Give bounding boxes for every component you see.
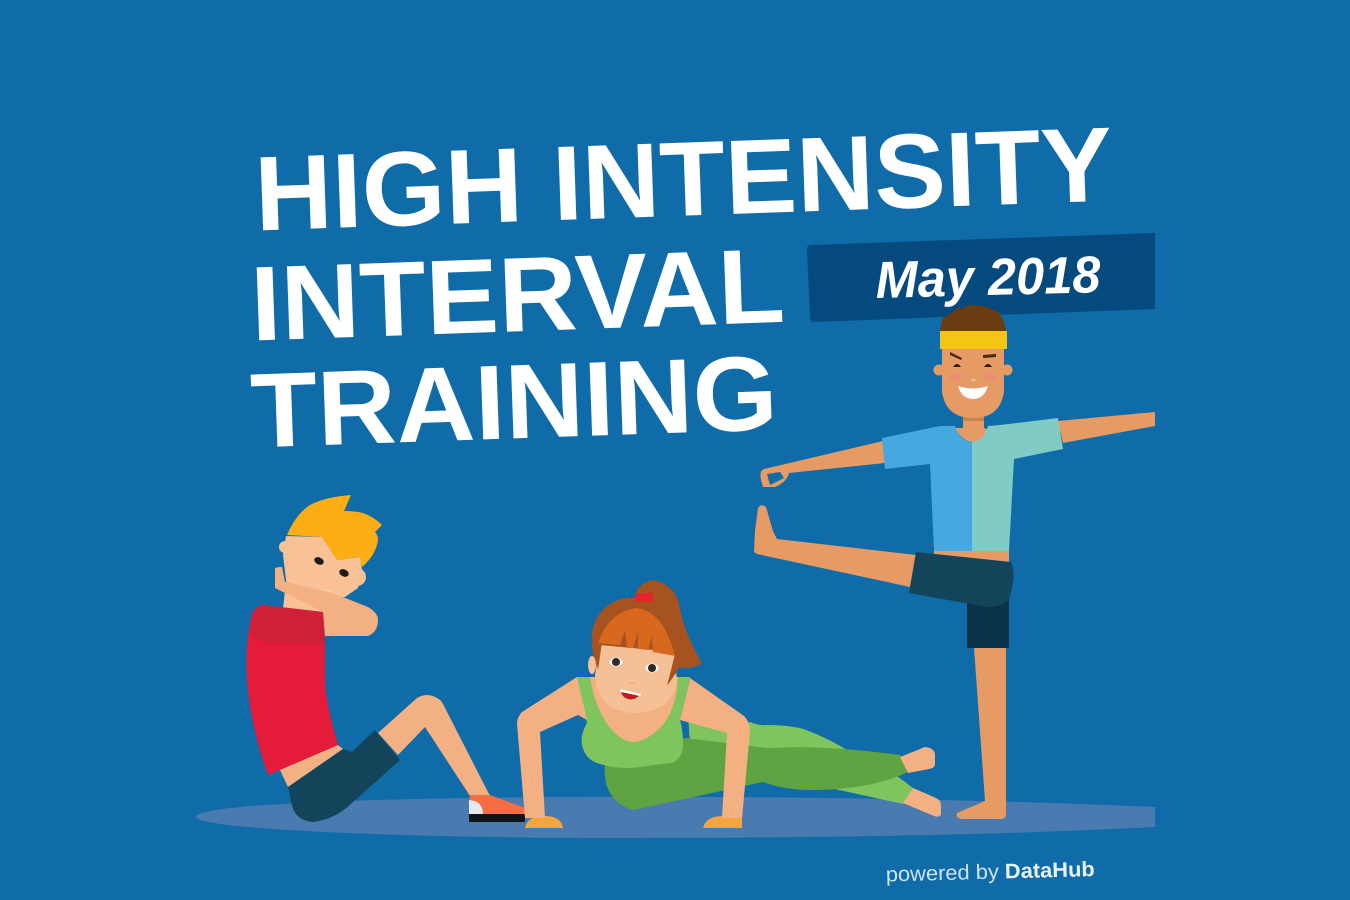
man face details — [949, 352, 997, 399]
man hair — [940, 305, 1006, 331]
woman side hair — [592, 640, 682, 686]
man shirt right — [972, 418, 1063, 551]
woman hands — [525, 816, 742, 828]
boy head — [279, 536, 366, 597]
man hand gap — [767, 472, 784, 485]
title — [249, 106, 1114, 470]
figure: woman doing push-ups — [517, 580, 941, 828]
title: TRAINING — [249, 334, 779, 470]
title: HIGH INTENSITY — [253, 106, 1114, 253]
woman body — [605, 738, 908, 810]
figure: man balancing on one leg — [754, 305, 1155, 819]
floor mat — [196, 797, 1155, 838]
man raised leg — [754, 505, 916, 587]
woman lower leg — [830, 776, 913, 804]
man head — [942, 345, 1004, 418]
date banner — [807, 233, 1155, 322]
man neck — [955, 410, 990, 442]
man headband — [940, 331, 1007, 349]
woman ponytail — [635, 580, 702, 668]
boy neck — [283, 590, 340, 615]
boy leg — [378, 695, 490, 796]
man waist — [934, 549, 1009, 564]
woman chest — [590, 677, 678, 742]
boy shorts — [288, 730, 400, 822]
woman feet — [900, 747, 941, 817]
boy belly — [280, 745, 343, 787]
man shirt left — [882, 426, 973, 551]
woman top — [577, 677, 690, 768]
woman face details — [610, 658, 658, 700]
man neck shadow — [963, 416, 984, 421]
man front shorts — [909, 552, 1014, 607]
woman fringe — [598, 608, 675, 656]
man right arm — [1058, 412, 1155, 443]
man ears — [934, 364, 1012, 376]
title: INTERVAL — [249, 227, 786, 363]
boy hair — [287, 495, 382, 567]
boy shirt — [246, 605, 338, 775]
woman face — [595, 645, 677, 713]
man left arm — [760, 441, 885, 487]
figure: boy doing sit-ups — [246, 495, 525, 822]
man standing leg — [956, 648, 1006, 819]
date banner: May 2018 — [875, 246, 1101, 310]
boy shoe — [469, 795, 525, 822]
credit: powered by DataHub — [886, 858, 1095, 886]
woman ear — [588, 656, 596, 674]
boy arm — [275, 567, 378, 636]
man back shorts — [967, 590, 1009, 648]
woman hair — [592, 598, 681, 686]
woman hair tie — [635, 593, 653, 602]
woman upper leg — [688, 714, 847, 760]
woman arms — [517, 677, 750, 818]
